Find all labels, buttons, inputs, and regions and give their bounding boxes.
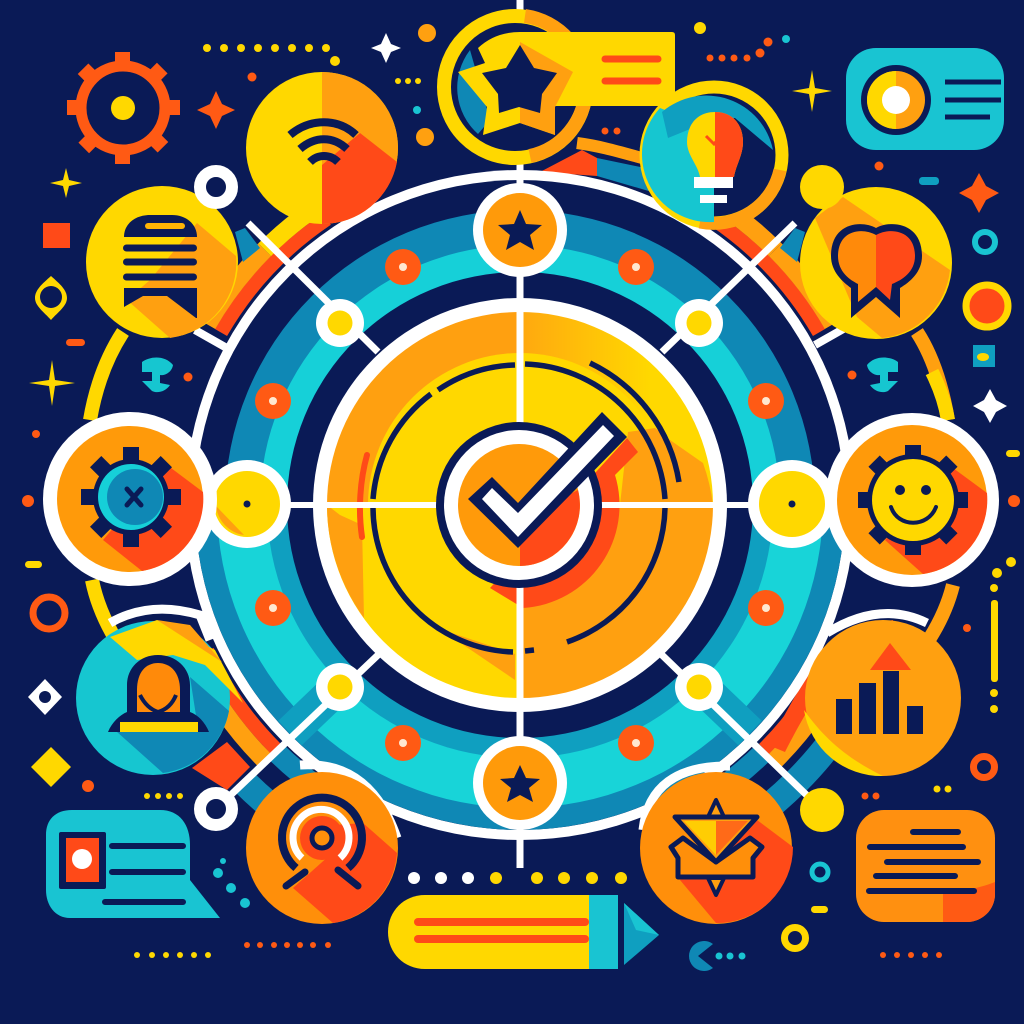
connector under star and bulb [540,143,652,192]
callout: bottom right card [856,810,995,922]
decorative right dashes [25,177,1020,913]
crosshair lines [195,0,845,868]
node: right yellow [748,460,836,548]
red curve near bar chart [768,620,893,752]
decorative teal glyphs [142,357,898,392]
red block lower left [192,742,250,790]
icon: gear top left [67,52,180,164]
small dots [22,72,1020,792]
icon: light bulb [642,87,782,223]
callout: top right card [846,48,1004,150]
node: left yellow [203,460,291,548]
icon: bar chart circle right [804,614,961,776]
decorative dotted lines [134,22,952,960]
small junction nodes [316,299,723,711]
icon: pencil bar [388,895,659,969]
callout: bottom left speech card [46,810,220,918]
panel: central dial [327,312,713,698]
icon: wifi circle [246,72,398,224]
panel: main ring [185,170,855,840]
icon: central check badge [436,412,627,588]
small orange ring dots [255,249,784,761]
icon: heart ribbon circle right [800,187,952,339]
icon: pacman glyph [689,941,713,971]
icon: gear X circle left [43,412,217,586]
icon: smiley gear circle right [825,413,999,587]
node: bottom star [473,736,567,830]
outer side arcs [90,332,953,640]
icon: target circle bottom [246,765,398,924]
icon: shield star circle bottom [640,766,793,924]
outer ring segments behind satellites [193,192,859,859]
icon: star with tag [444,16,675,158]
icon: person circle left [76,609,243,775]
node: top star [473,183,567,277]
dotted row above pencil [408,872,627,884]
icon: banner circle left [86,186,238,338]
decorative stars and diamonds [28,33,1007,787]
